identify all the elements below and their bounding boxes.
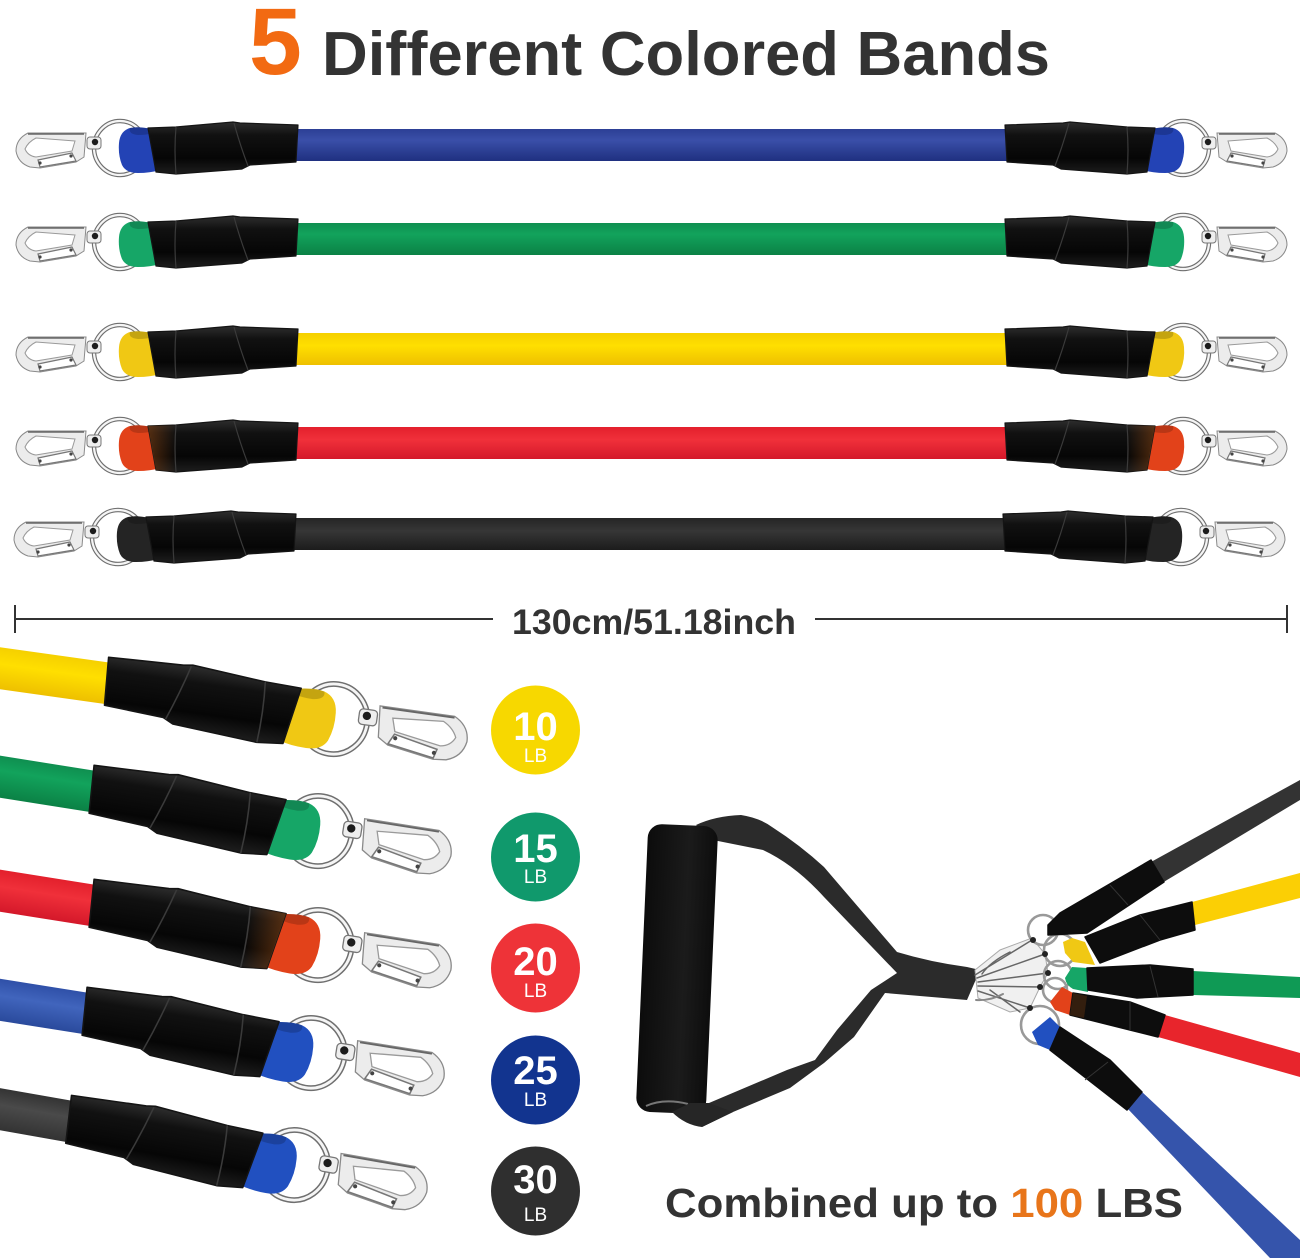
handle with strap	[636, 815, 980, 1127]
strap loop over grip	[672, 1103, 733, 1127]
weight badge: 30 LB: LB	[524, 1205, 547, 1226]
weight badge: 25 LB	[491, 1036, 580, 1124]
close-up: blue band end	[0, 956, 450, 1109]
band: red	[16, 419, 1287, 473]
fabric strap	[690, 815, 980, 1127]
fan band: red	[1050, 987, 1300, 1077]
weight badge: 15 LB: LB	[524, 867, 547, 888]
weight badge: 10 LB: 10	[513, 705, 558, 749]
close-up: yellow band end	[0, 629, 472, 773]
close-up: red band end	[0, 848, 457, 1001]
weight badge: 30 LB: 30	[513, 1158, 558, 1202]
weight badge: 15 LB: 15	[513, 827, 558, 871]
length label: 130cm/51.18inch	[512, 603, 796, 642]
band: black	[14, 510, 1285, 564]
fan band: yellow	[1063, 873, 1300, 965]
weight badge: 25 LB: 25	[513, 1049, 558, 1093]
close-up: green band end	[0, 734, 457, 887]
carabiner cluster	[975, 915, 1076, 1044]
band: blue	[16, 121, 1287, 175]
weight badge: 20 LB: LB	[524, 981, 547, 1002]
weight badge: 10 LB: LB	[524, 746, 547, 767]
weight badge: 10 LB	[491, 686, 580, 774]
band: green	[16, 215, 1287, 269]
fan band: black	[1048, 780, 1300, 935]
grip end lip	[646, 1101, 688, 1106]
title	[249, 0, 1050, 95]
weight badge: 30 LB	[491, 1146, 580, 1236]
foam grip	[636, 824, 718, 1114]
combined weight caption: Combined up to 100 LBS	[665, 1180, 1183, 1226]
weight badge: 25 LB: LB	[524, 1090, 547, 1111]
length dimension	[15, 603, 1287, 642]
title words: Different Colored Bands	[322, 20, 1050, 89]
fan band: green	[1065, 965, 1300, 998]
fan band: blue	[1032, 1017, 1300, 1258]
weight badge: 20 LB	[491, 924, 580, 1012]
band: yellow	[16, 325, 1287, 379]
weight badge: 15 LB	[491, 812, 580, 902]
close-up: black band end	[0, 1061, 433, 1223]
weight badge: 20 LB: 20	[513, 940, 558, 984]
